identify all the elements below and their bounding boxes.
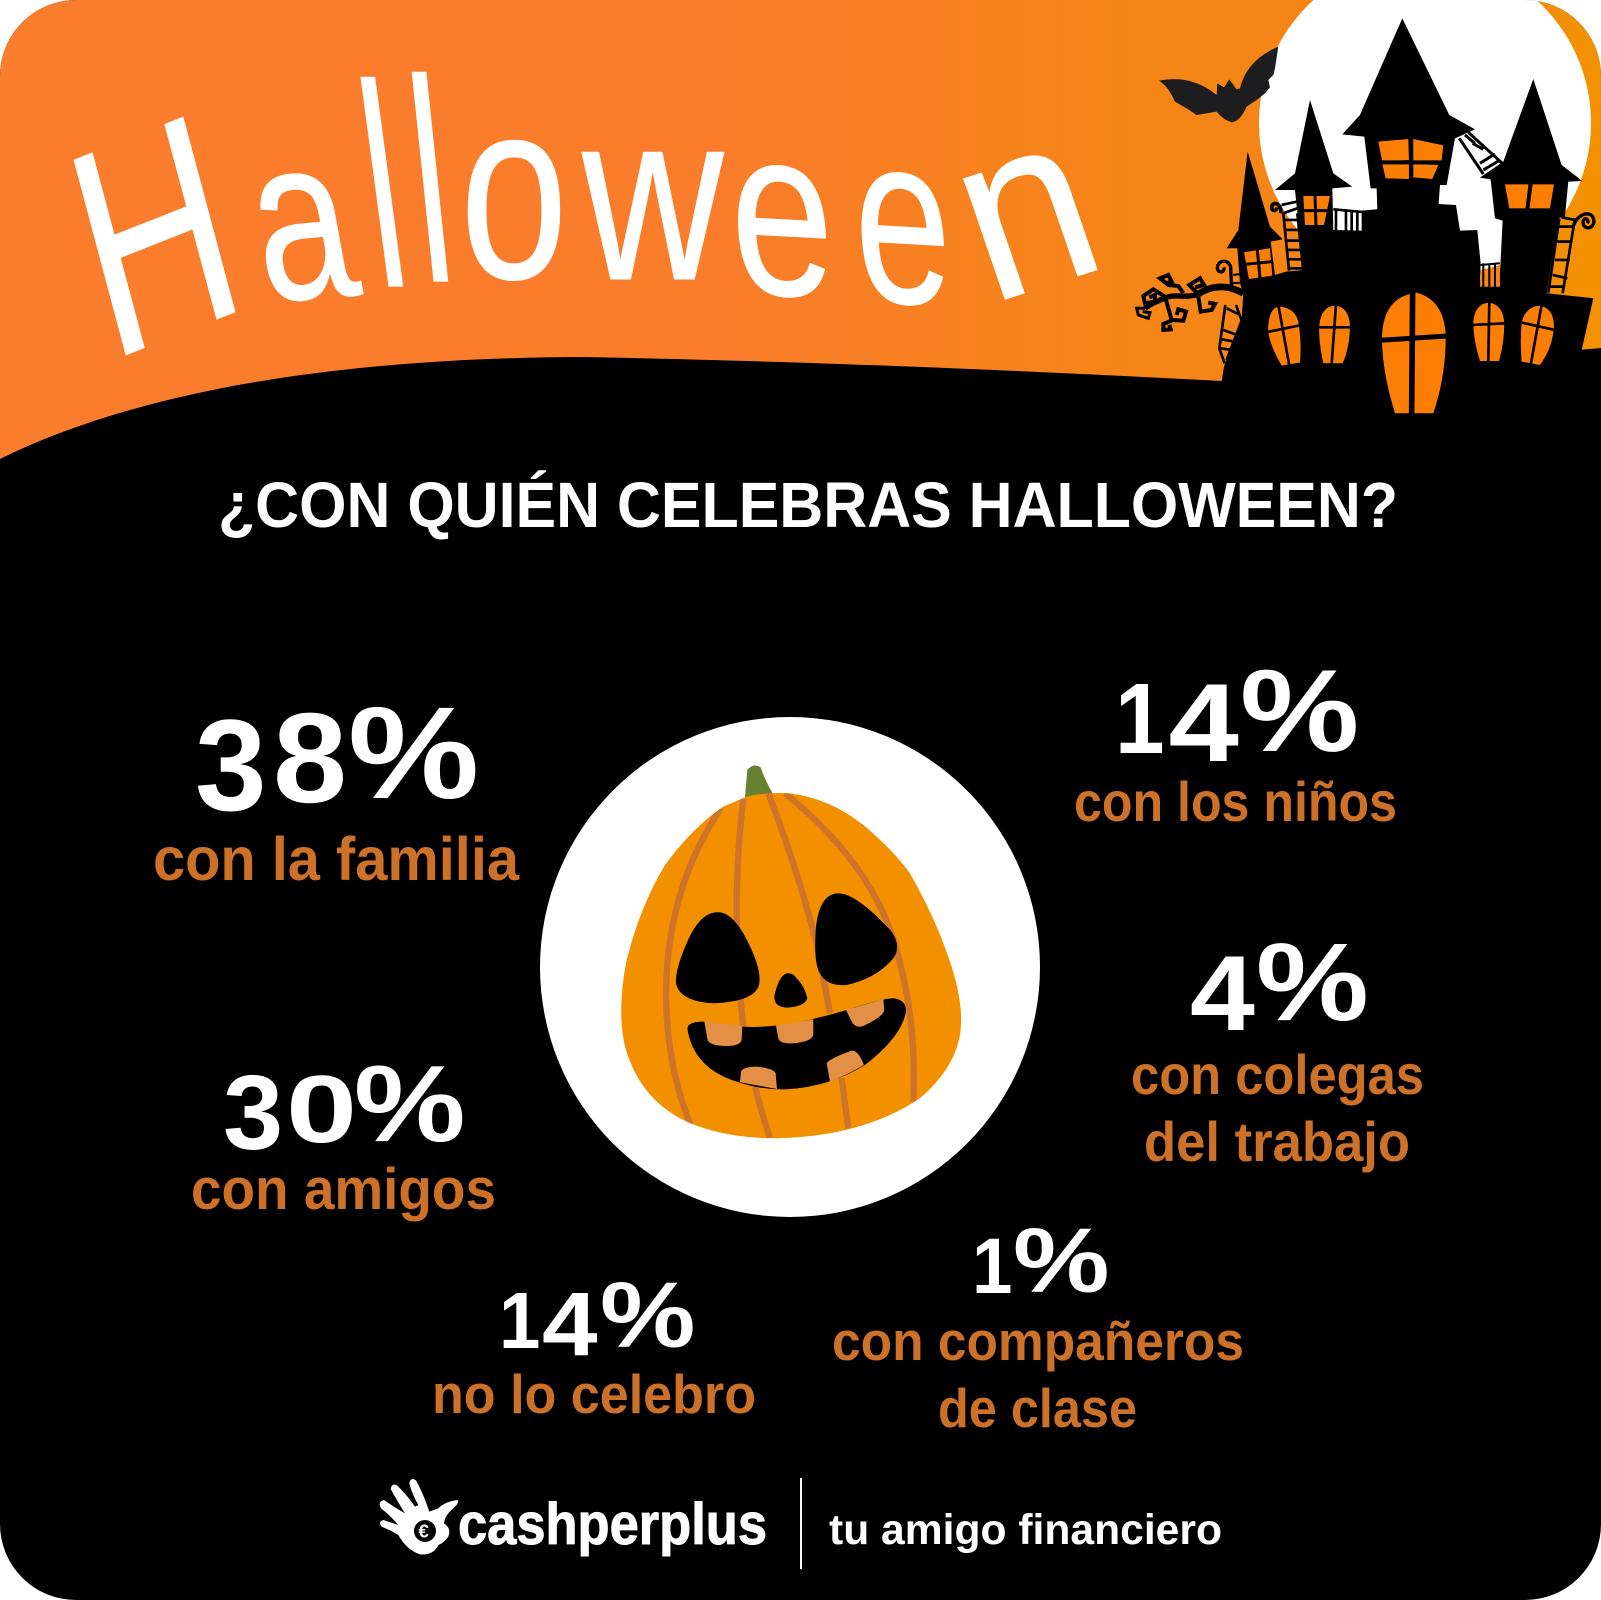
icon: cashperplus hand logo: € — [418, 1521, 429, 1542]
tagline: tu amigo financiero — [829, 1506, 1222, 1554]
stat: 1% con compañeros de clase: con compañeros — [832, 1310, 1244, 1372]
stat: 38% con la familia: % — [348, 680, 479, 826]
lit windows — [1244, 139, 1554, 413]
stat: 38% con la familia: 3 — [195, 693, 267, 838]
lower left ladder — [1219, 305, 1242, 359]
icon: jack-o-lantern — [621, 766, 961, 1138]
title: Halloween (individually warped letters): w — [581, 63, 724, 330]
stat: 30% con amigos: 0 — [286, 1055, 357, 1162]
title: Halloween (individually warped letters): o — [460, 47, 568, 333]
stat: 1% con compañeros de clase: % — [1013, 1210, 1110, 1312]
title: Halloween (individually warped letters): l — [343, 26, 422, 347]
panel: orange header wave — [0, 0, 1601, 459]
stat: 14% con los niños: con los niños — [1074, 770, 1397, 833]
lower right railing — [1481, 265, 1500, 287]
stat: 4% con colegas del trabajo: 4 — [1190, 933, 1255, 1053]
stat: 4% con colegas del trabajo: con colegas — [1131, 1043, 1424, 1106]
stat: 30% con amigos: 3 — [223, 1053, 283, 1172]
twisted branch — [1137, 275, 1243, 330]
icon: moon — [1259, 0, 1591, 289]
icon: bat — [1159, 47, 1278, 122]
stat: 30% con amigos — [193, 1066, 494, 1222]
icon: haunted house — [1134, 18, 1596, 414]
stat: 14% con los niños: % — [1240, 645, 1359, 776]
stat: 1% con compañeros de clase — [834, 1228, 1242, 1428]
stat: 4% con colegas del trabajo: del trabajo — [1144, 1110, 1410, 1173]
castle silhouette — [1222, 18, 1594, 381]
stat: 4% con colegas del trabajo: % — [1256, 922, 1369, 1044]
title: Halloween (individually warped letters): a — [228, 86, 372, 350]
stat: 4% con colegas del trabajo — [1131, 922, 1424, 1173]
heading: question: ¿CON QUIÉN CELEBRAS HALLOWEEN? — [218, 469, 1398, 541]
logo wordmark: cashperplus — [458, 1492, 767, 1557]
stat: 14% no lo celebro — [435, 1282, 754, 1414]
title: Halloween (individually warped letters): n — [919, 58, 1128, 353]
stat: 38% con la familia: con la familia — [153, 825, 520, 893]
title: Halloween (individually warped letters): H — [42, 50, 267, 421]
circle badge with pumpkin — [540, 717, 1040, 1217]
stat: 1% con compañeros de clase: de clase — [938, 1377, 1137, 1439]
stat: 14% no lo celebro: % — [600, 1264, 695, 1367]
logo divider — [800, 1478, 802, 1569]
icon: cashperplus hand logo — [380, 1479, 458, 1554]
ladders and railings — [1217, 132, 1594, 293]
stat: 14% con los niños — [1076, 670, 1395, 822]
title: Halloween (individually warped letters): e — [847, 81, 957, 357]
title: Halloween (individually warped letters) — [74, 72, 1098, 356]
stat: 14% no lo celebro: 1 — [499, 1277, 540, 1366]
stat: 38% con la familia: 8 — [273, 686, 347, 829]
stat: 30% con amigos: % — [354, 1043, 465, 1164]
title: Halloween (individually warped letters): e — [723, 76, 839, 349]
stat: 14% no lo celebro: 4 — [542, 1275, 598, 1375]
stat: 30% con amigos: con amigos — [191, 1157, 496, 1222]
window mullions — [1245, 138, 1555, 415]
title: Halloween (individually warped letters): l — [396, 20, 465, 343]
stat: 14% con los niños: 4 — [1168, 661, 1239, 785]
stat: 38% con la familia — [155, 706, 520, 880]
stat: 1% con compañeros de clase: 1 — [972, 1222, 1012, 1311]
stat: 14% con los niños: 1 — [1115, 663, 1164, 775]
stat: 14% no lo celebro: no lo celebro — [432, 1363, 756, 1425]
